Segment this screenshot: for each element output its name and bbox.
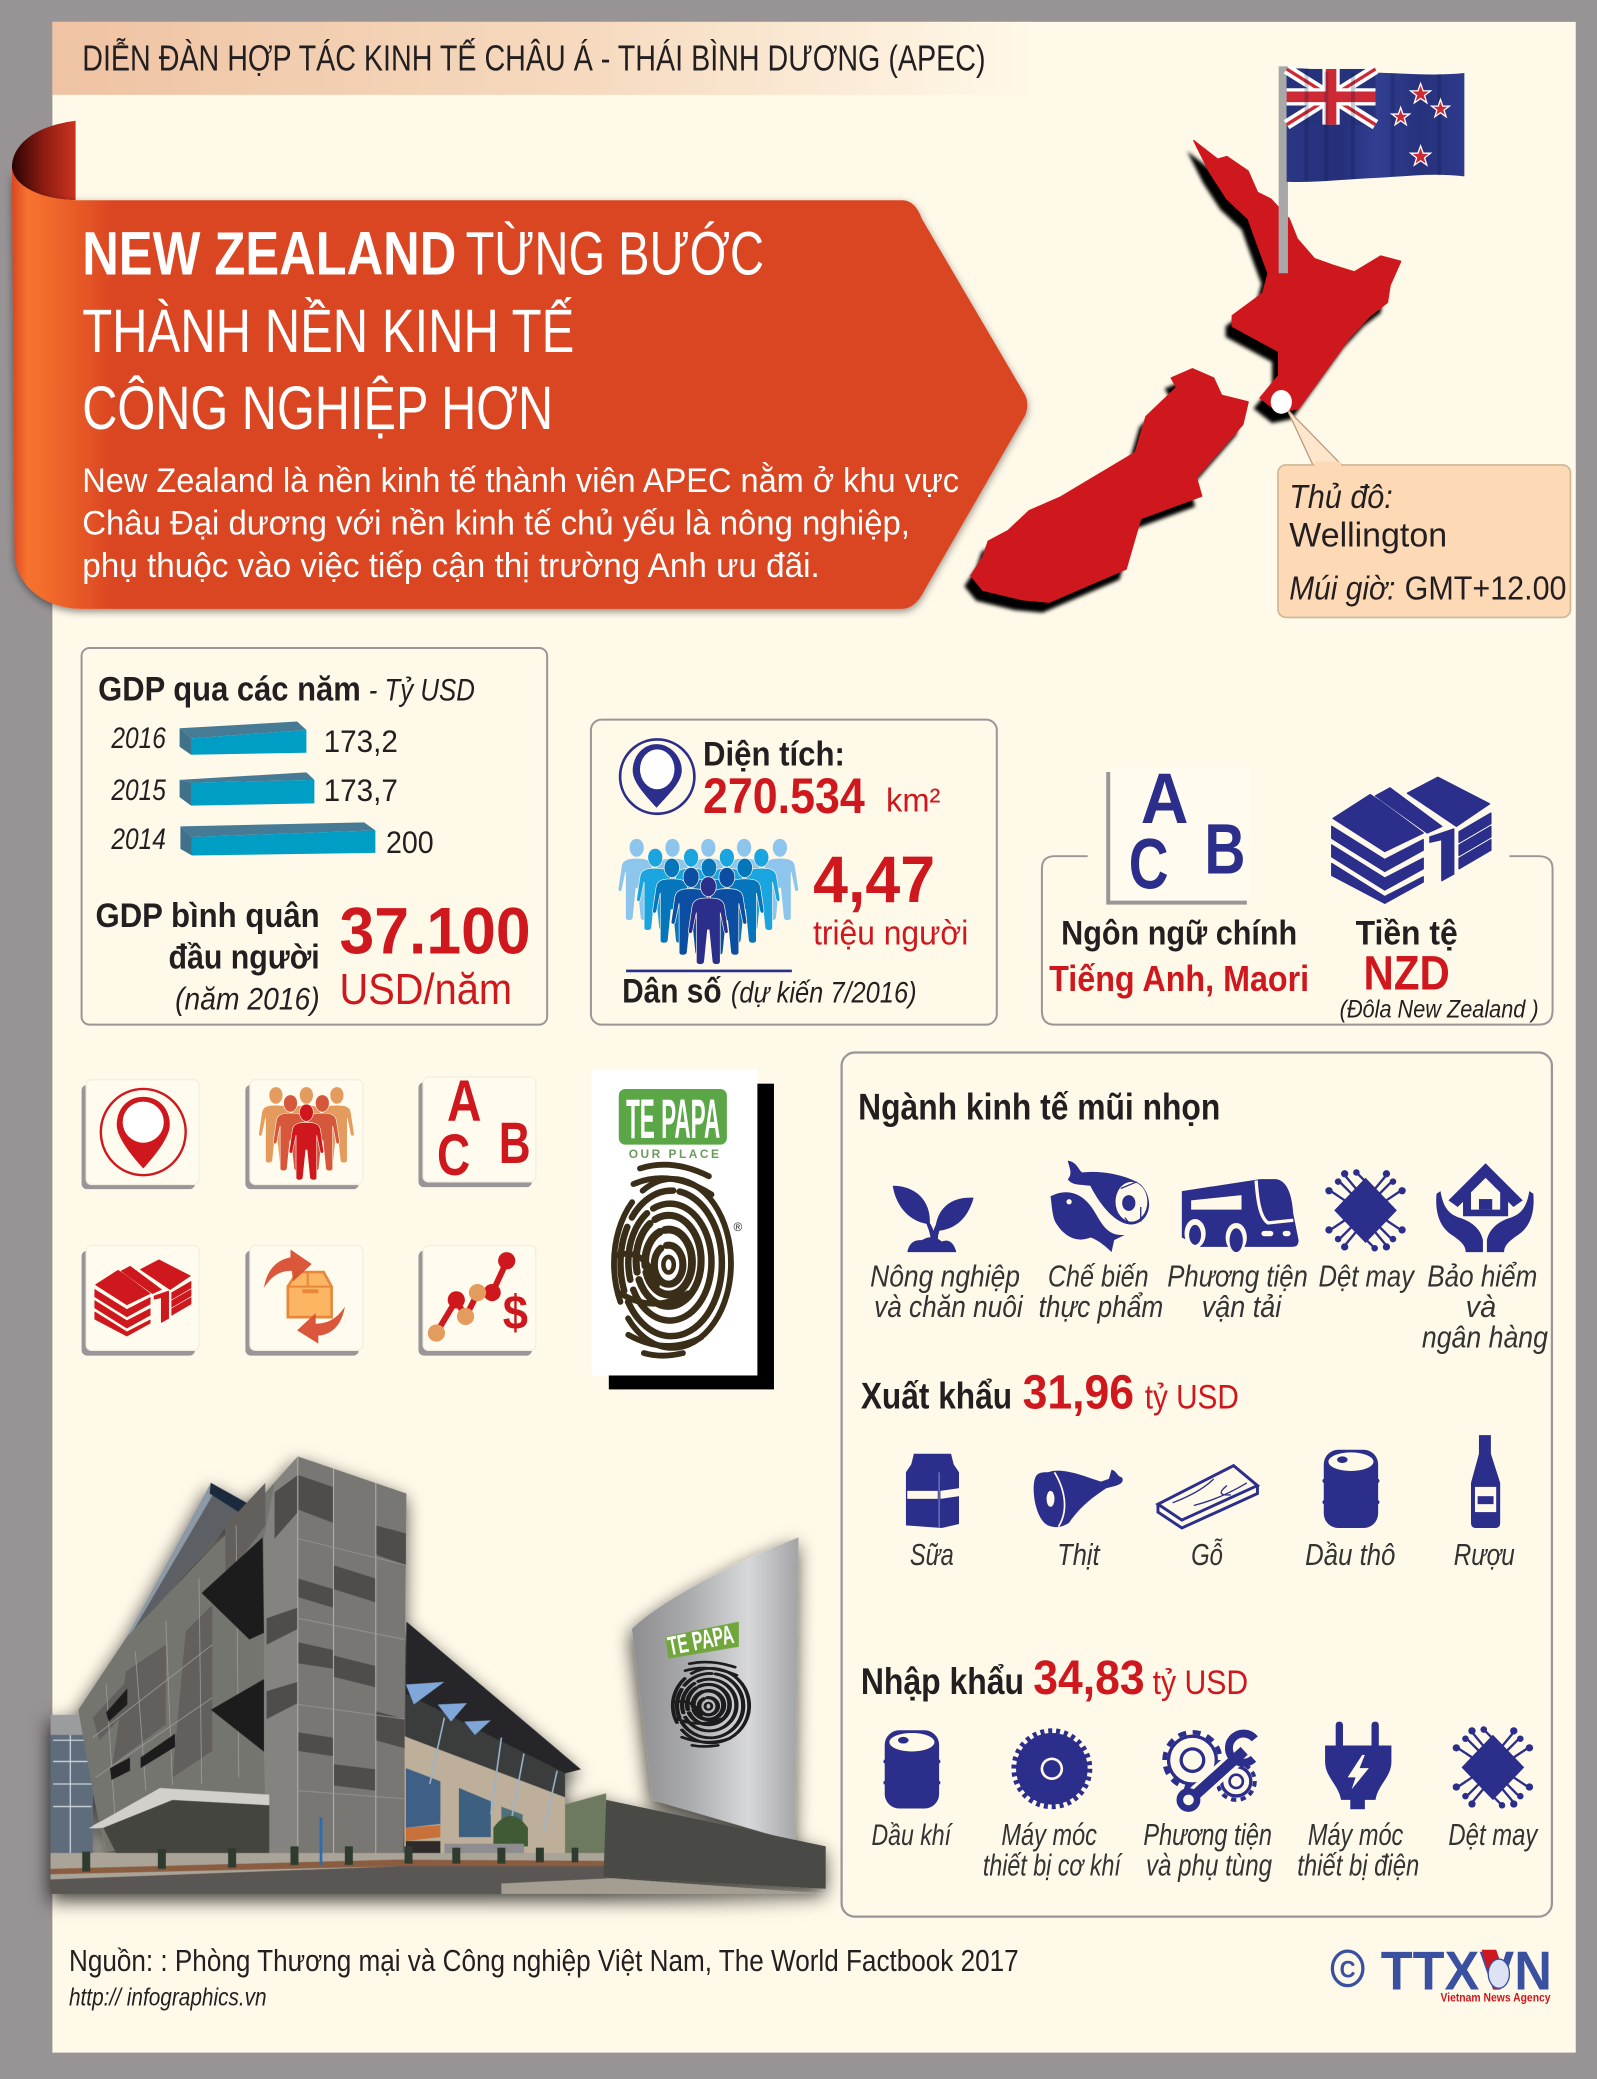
heading: imports: Nhập khẩu: [861, 1660, 1024, 1702]
GDP heading: - Tỷ USD: [369, 671, 475, 707]
panel: language and currency: [1042, 759, 1553, 1025]
heading: exports: 31,96: [1023, 1367, 1134, 1420]
heading: imports: tỷ USD: [1153, 1664, 1248, 1702]
bar chart: 2016: [111, 723, 166, 755]
icon: bus: [1182, 1179, 1299, 1252]
icon tile: location pin: [82, 1080, 199, 1189]
currency text: (Đôla New Zealand ): [1340, 995, 1539, 1023]
sail logo: [665, 1619, 749, 1746]
area figures: [703, 735, 940, 824]
hillside: [557, 1793, 606, 1857]
neighbouring building: [50, 1715, 93, 1861]
currency text: [1340, 914, 1539, 1023]
heading: imports: [861, 1652, 1248, 1705]
icon: oil and gas barrel: [883, 1730, 940, 1809]
GDP per capita: 37.100: [340, 895, 531, 969]
Te Papa logo poster: OUR PLACE: [629, 1147, 719, 1161]
GDP per capita: (năm 2016): [175, 980, 320, 1016]
language text: Ngôn ngữ chính: [1061, 914, 1297, 952]
sector labels: Nông nghiệp: [870, 1260, 1020, 1294]
tower: [264, 1456, 406, 1860]
map of New Zealand: [964, 141, 1401, 613]
icon tile: ABC: [418, 1069, 536, 1188]
source line: [69, 1944, 1019, 2012]
population figures: [622, 843, 968, 1011]
currency text: Tiền tệ: [1356, 914, 1458, 952]
icon: wine bottle: [1471, 1435, 1500, 1528]
icon tile: growth chart with dollar sign: $: [503, 1287, 528, 1340]
area figures: 270.534: [703, 767, 865, 824]
icon tile: ABC: A: [447, 1069, 481, 1134]
roof wing: [127, 1483, 247, 1637]
population figures: 4,47: [813, 843, 935, 917]
header band: DIỄN ĐÀN HỢP TÁC KINH TẾ CHÂU Á - THÁI BÌNH DƯƠNG (APEC): [82, 38, 986, 78]
sector labels: và chăn nuôi: [874, 1290, 1024, 1324]
import labels: thiết bị điện: [1297, 1849, 1419, 1883]
import labels: Máy móc: [1308, 1818, 1403, 1852]
heading: exports: tỷ USD: [1145, 1379, 1239, 1417]
language text: [1049, 914, 1309, 999]
sector labels: Dệt may: [1318, 1260, 1415, 1294]
title text: TỪNG BƯỚC: [466, 220, 764, 288]
area figures: Diện tích:: [703, 735, 845, 773]
ground: [50, 1817, 825, 1894]
intro paragraph: Châu Đại dương với nền kinh tế chủ yếu là nông nghiệp,: [82, 505, 910, 543]
icon: crowd of people: [618, 839, 799, 964]
Te Papa logo poster: ®: [734, 1220, 743, 1234]
callout: capital and time zone: GMT+12.00: [1405, 571, 1566, 608]
icon: textile pattern: [1453, 1726, 1533, 1809]
GDP heading: GDP qua các năm: [98, 670, 361, 708]
area figures: km²: [886, 783, 940, 820]
silver sail: [632, 1537, 798, 1842]
icon: textile pattern: [1325, 1169, 1406, 1251]
import labels: [871, 1818, 1539, 1883]
GDP per capita: đầu người: [168, 938, 320, 976]
export labels: Sữa: [910, 1538, 954, 1572]
icon: banknote stack: [1332, 777, 1491, 903]
export labels: [910, 1537, 1515, 1572]
Te Papa logo poster: [592, 1069, 774, 1389]
source line: http:// infographics.vn: [69, 1984, 267, 2012]
title text: THÀNH NỀN KINH TẾ: [82, 297, 574, 365]
dark base wedge: [604, 1800, 826, 1889]
icon: saw blade: [1014, 1731, 1090, 1807]
sector labels: và: [1466, 1290, 1496, 1324]
GDP per capita: USD/năm: [340, 965, 512, 1014]
intro paragraph: New Zealand là nền kinh tế thành viên APEC nằm ở khu vực: [82, 461, 959, 500]
TTXVN logo: Vietnam News Agency: [1440, 1991, 1551, 2005]
sector labels: Phương tiện: [1167, 1260, 1308, 1294]
icon: ABC card: C: [1129, 825, 1169, 905]
icon tile: ABC: C: [437, 1123, 470, 1188]
sector labels: Chế biến: [1048, 1260, 1149, 1294]
icon: electric plug: [1325, 1722, 1391, 1809]
bar chart: 2015: [111, 775, 166, 807]
population figures: (dự kiến 7/2016): [731, 978, 917, 1010]
export labels: Rượu: [1454, 1538, 1515, 1572]
population figures: triệu người: [813, 914, 968, 952]
title text: CÔNG NGHIỆP HƠN: [82, 374, 553, 442]
icon: gears and wrench: [1165, 1732, 1255, 1809]
callout: capital and time zone: [1271, 390, 1570, 617]
panel: GDP: [82, 648, 547, 1025]
source line: Nguồn: : Phòng Thương mại và Công nghiệp Việt Nam, The World Factbook 2017: [69, 1944, 1019, 1978]
heading: exports: [861, 1367, 1239, 1420]
import labels: thiết bị cơ khí: [983, 1849, 1123, 1883]
heading: imports: 34,83: [1033, 1652, 1145, 1705]
sector labels: vận tải: [1202, 1290, 1282, 1324]
title text: NEW ZEALAND: [82, 220, 456, 288]
callout: capital and time zone: Thủ đô:: [1289, 479, 1393, 516]
population figures: Dân số: [622, 973, 722, 1011]
window voids: [106, 1537, 266, 1780]
sector labels: ngân hàng: [1422, 1321, 1548, 1355]
entrance canopy: [88, 1788, 269, 1860]
intro paragraph: [82, 461, 959, 585]
TTXVN logo: TTXVN: [1381, 1941, 1552, 2002]
Te Papa logo poster: TE PAPA: [626, 1088, 720, 1150]
icon tile: ABC: B: [499, 1111, 531, 1176]
icon tile: banknote stack: [82, 1245, 199, 1356]
bar chart: 173,2: [324, 723, 398, 759]
header band: [52, 22, 1034, 95]
import labels: Máy móc: [1001, 1818, 1097, 1852]
bar chart: [111, 722, 434, 860]
left facade: [78, 1456, 298, 1860]
icon tile: growth chart with dollar sign: [418, 1245, 536, 1356]
bar chart: 173,7: [324, 772, 398, 808]
icon: ABC card: A: [1141, 759, 1188, 839]
import labels: Dệt may: [1448, 1818, 1539, 1852]
icon tile: trade box with arrows: [245, 1245, 363, 1356]
bar chart: 2014: [111, 824, 166, 856]
import labels: Phương tiện: [1143, 1818, 1272, 1852]
callout: capital and time zone: Múi giờ:: [1289, 571, 1395, 608]
photo: Te Papa museum building: [50, 1456, 826, 1894]
TTXVN logo: C: [1340, 1957, 1356, 1984]
panel: area and population: [591, 720, 997, 1025]
icon: wood plank: [1158, 1466, 1257, 1528]
GDP per capita: GDP bình quân: [96, 897, 320, 935]
heading: key sectors: Ngành kinh tế mũi nhọn: [858, 1085, 1220, 1127]
language text: Tiếng Anh, Maori: [1049, 959, 1309, 999]
icon: milk carton: [906, 1454, 959, 1528]
export labels: Dầu thô: [1305, 1538, 1395, 1572]
sector labels: thực phẩm: [1039, 1290, 1163, 1324]
icon: crude oil barrel: [1322, 1450, 1379, 1528]
icon: house in hands: [1436, 1163, 1534, 1252]
sector labels: [870, 1260, 1548, 1355]
flag of New Zealand: [1279, 66, 1464, 273]
sail logo: TE PAPA: [665, 1619, 736, 1661]
heading: exports: Xuất khẩu: [861, 1375, 1012, 1417]
icon tile: people: [245, 1080, 363, 1189]
icon: ABC card: B: [1204, 809, 1246, 889]
intro paragraph: phụ thuộc vào việc tiếp cận thị trường Anh ưu đãi.: [82, 547, 820, 585]
icon: plant: [893, 1186, 974, 1252]
export labels: Gỗ: [1191, 1537, 1223, 1572]
export labels: Thịt: [1057, 1538, 1101, 1572]
callout: capital and time zone: Wellington: [1289, 516, 1447, 554]
title text: [82, 220, 764, 442]
icon: ABC card: [1106, 759, 1251, 905]
icon: fish and meat: [1051, 1161, 1149, 1252]
currency text: NZD: [1364, 947, 1450, 1000]
import labels: và phụ tùng: [1146, 1849, 1272, 1883]
right wing: [405, 1622, 581, 1860]
icon: ham: [1034, 1470, 1123, 1527]
icon: location pin: [620, 739, 694, 814]
import labels: Dầu khí: [871, 1820, 953, 1852]
GDP per capita: [96, 895, 531, 1016]
sector labels: Bảo hiểm: [1427, 1260, 1537, 1294]
bar chart: 200: [386, 824, 434, 860]
panel: key sectors and trade: [842, 1052, 1552, 1917]
title ribbon: [12, 121, 1027, 609]
